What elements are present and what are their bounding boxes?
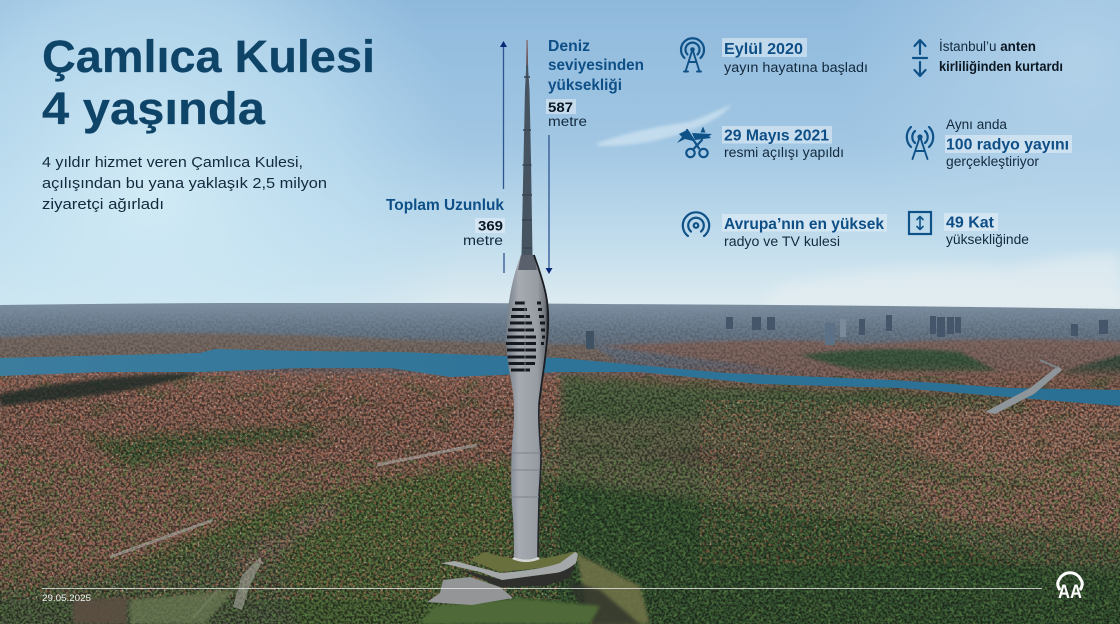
label: height above sea level: 587 xyxy=(548,99,573,115)
roads and plots xyxy=(110,520,213,557)
label: total length xyxy=(386,197,505,248)
dark woods on the left shore xyxy=(0,373,200,406)
item: Avrupa'nın en yüksek: radyo ve TV kulesi xyxy=(724,234,840,249)
description: 4 yıldır hizmet veren Çamlıca Kulesi, xyxy=(42,155,303,171)
window bands xyxy=(506,303,545,370)
item: 100 radyo yayını: gerçekleştiriyor xyxy=(946,154,1040,169)
arrow: height above sea level xyxy=(546,135,552,274)
title xyxy=(42,31,375,134)
item: İstanbul'u anten xyxy=(913,39,1063,76)
icon: broadcast tower xyxy=(681,38,704,72)
label: total length: metre xyxy=(463,233,503,248)
item: 100 radyo yayını: 100 radyo yayını xyxy=(946,136,1069,154)
icon: concentric signal xyxy=(683,212,709,236)
item: Eylül 2020 xyxy=(681,38,868,75)
far shore xyxy=(0,303,1120,380)
item: Avrupa'nın en yüksek: Avrupa’nın en yüksek xyxy=(724,216,884,233)
label: total length: Toplam Uzunluk xyxy=(386,197,504,214)
date: 29.05.2025 xyxy=(42,593,91,604)
description: ziyaretçi ağırladı xyxy=(42,197,164,213)
item: İstanbul'u anten: İstanbul’u anten xyxy=(939,39,1036,54)
Bosphorus xyxy=(0,349,1120,406)
skyline xyxy=(586,315,1108,349)
title: Çamlıca Kulesi xyxy=(42,31,375,82)
item: 49 Kat xyxy=(909,212,1029,247)
item: 100 radyo yayını xyxy=(907,117,1072,169)
logo: AA xyxy=(1058,573,1082,603)
aerial city photo xyxy=(0,303,1120,624)
icon: antenna with waves xyxy=(907,127,933,159)
title: 4 yaşında xyxy=(42,83,266,134)
label: height above sea level: Deniz xyxy=(548,38,590,55)
item: İstanbul'u anten: kirliliğinden kurtardı xyxy=(939,59,1063,74)
footer line xyxy=(42,588,1042,589)
texture: tree patches and roofs xyxy=(0,304,1120,624)
item: 29 Mayıs 2021 xyxy=(677,126,844,160)
tower base xyxy=(427,552,578,605)
item: 29 Mayıs 2021: resmi açılışı yapıldı xyxy=(724,145,844,160)
icon: boxed vertical arrow xyxy=(909,212,931,234)
speckle with a haze fade towards the horizon xyxy=(0,304,1120,624)
logo: AA: AA xyxy=(1058,582,1082,603)
item: Eylül 2020: Eylül 2020 xyxy=(724,41,803,58)
label: height above sea level: yüksekliği xyxy=(548,77,622,94)
sky background xyxy=(0,0,1120,310)
arrow: total length xyxy=(500,41,507,273)
label: total length: 369 xyxy=(478,218,503,234)
item: Eylül 2020: yayın hayatına başladı xyxy=(724,60,868,75)
tower body xyxy=(506,255,548,560)
icon: ribbon and scissors xyxy=(677,126,712,157)
description xyxy=(42,155,327,213)
label: height above sea level: metre xyxy=(548,114,587,129)
item: 49 Kat: yüksekliğinde xyxy=(946,232,1029,247)
tower xyxy=(506,40,548,562)
description: açılışından bu yana yaklaşık 2,5 milyon xyxy=(42,176,327,192)
item: 49 Kat: 49 Kat xyxy=(946,214,994,232)
label: height above sea level: seviyesinden xyxy=(548,57,644,74)
item: 100 radyo yayını: Aynı anda xyxy=(946,117,1007,132)
item: Avrupa'nın en yüksek xyxy=(683,212,887,249)
label: height above sea level xyxy=(546,38,644,129)
land colour zones xyxy=(0,372,1120,624)
item: 29 Mayıs 2021: 29 Mayıs 2021 xyxy=(724,128,829,144)
antenna mast xyxy=(522,40,532,255)
icon: up and down arrows xyxy=(913,40,927,76)
bridge xyxy=(985,366,1062,414)
